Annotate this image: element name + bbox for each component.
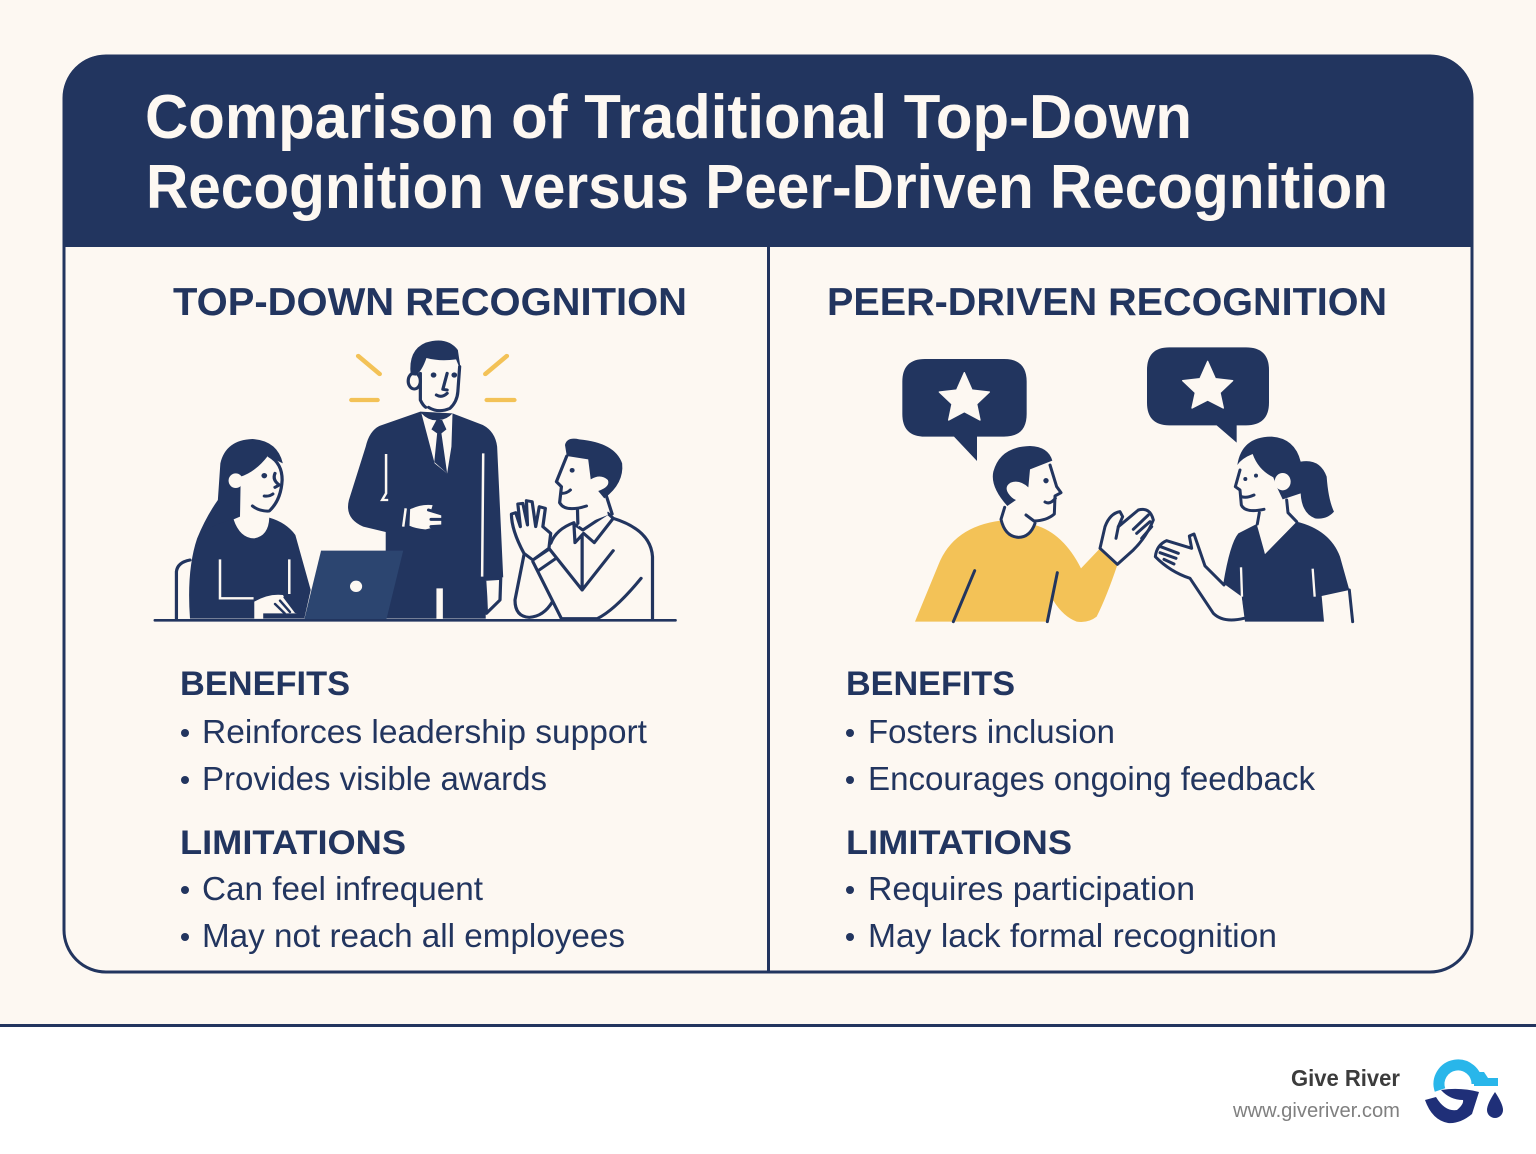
benefits: top-down: Provides visible awards <box>202 760 547 797</box>
column divider <box>767 247 770 972</box>
man in yellow sweater <box>915 446 1153 622</box>
speech bubble with star: left <box>902 359 1027 461</box>
speech bubble with star: right <box>1147 347 1269 443</box>
brand name: Give River <box>1291 1065 1400 1091</box>
woman at laptop <box>176 439 311 619</box>
standing manager <box>348 341 503 619</box>
illustration: two peers exchanging recognition <box>902 347 1353 622</box>
limitations: top-down: LIMITATIONS <box>180 824 406 862</box>
limitations: peer-driven: Requires participation <box>868 870 1195 907</box>
clapping man <box>511 439 652 619</box>
benefits: top-down: BENEFITS <box>180 665 350 703</box>
benefits: peer-driven: Fosters inclusion <box>868 713 1115 750</box>
footer <box>0 1024 1536 1154</box>
comparison panel <box>63 55 1473 972</box>
title <box>145 83 1388 222</box>
limitations: top-down <box>180 824 625 954</box>
woman in navy top <box>1155 437 1353 622</box>
benefits: top-down <box>180 665 647 797</box>
limitations: top-down: May not reach all employees <box>202 917 625 954</box>
benefits: peer-driven: Encourages ongoing feedback <box>868 760 1315 797</box>
limitations: peer-driven: May lack formal recognition <box>868 917 1277 954</box>
heading: top-down recognition: TOP-DOWN RECOGNITION <box>173 281 687 324</box>
benefits: top-down: Reinforces leadership support <box>202 713 647 750</box>
left column: top-down recognition <box>154 281 687 954</box>
right column: peer-driven recognition <box>827 281 1387 954</box>
benefits: peer-driven: BENEFITS <box>846 665 1015 703</box>
title: Comparison of Traditional Top-Down <box>145 83 1192 152</box>
laptop <box>304 551 403 619</box>
title: Recognition versus Peer-Driven Recognition <box>146 153 1388 222</box>
limitations: peer-driven <box>846 824 1277 954</box>
limitations: peer-driven: LIMITATIONS <box>846 824 1072 862</box>
website: www.giveriver.com <box>1232 1100 1400 1122</box>
benefits: peer-driven <box>846 665 1315 797</box>
yellow rays <box>351 356 514 400</box>
header band <box>63 55 1473 247</box>
illustration: manager recognised by colleagues <box>154 341 677 622</box>
limitations: top-down: Can feel infrequent <box>202 870 483 907</box>
table line <box>154 619 677 622</box>
heading: peer-driven recognition: PEER-DRIVEN RECOGNITION <box>827 281 1387 324</box>
logo <box>1425 1065 1503 1123</box>
